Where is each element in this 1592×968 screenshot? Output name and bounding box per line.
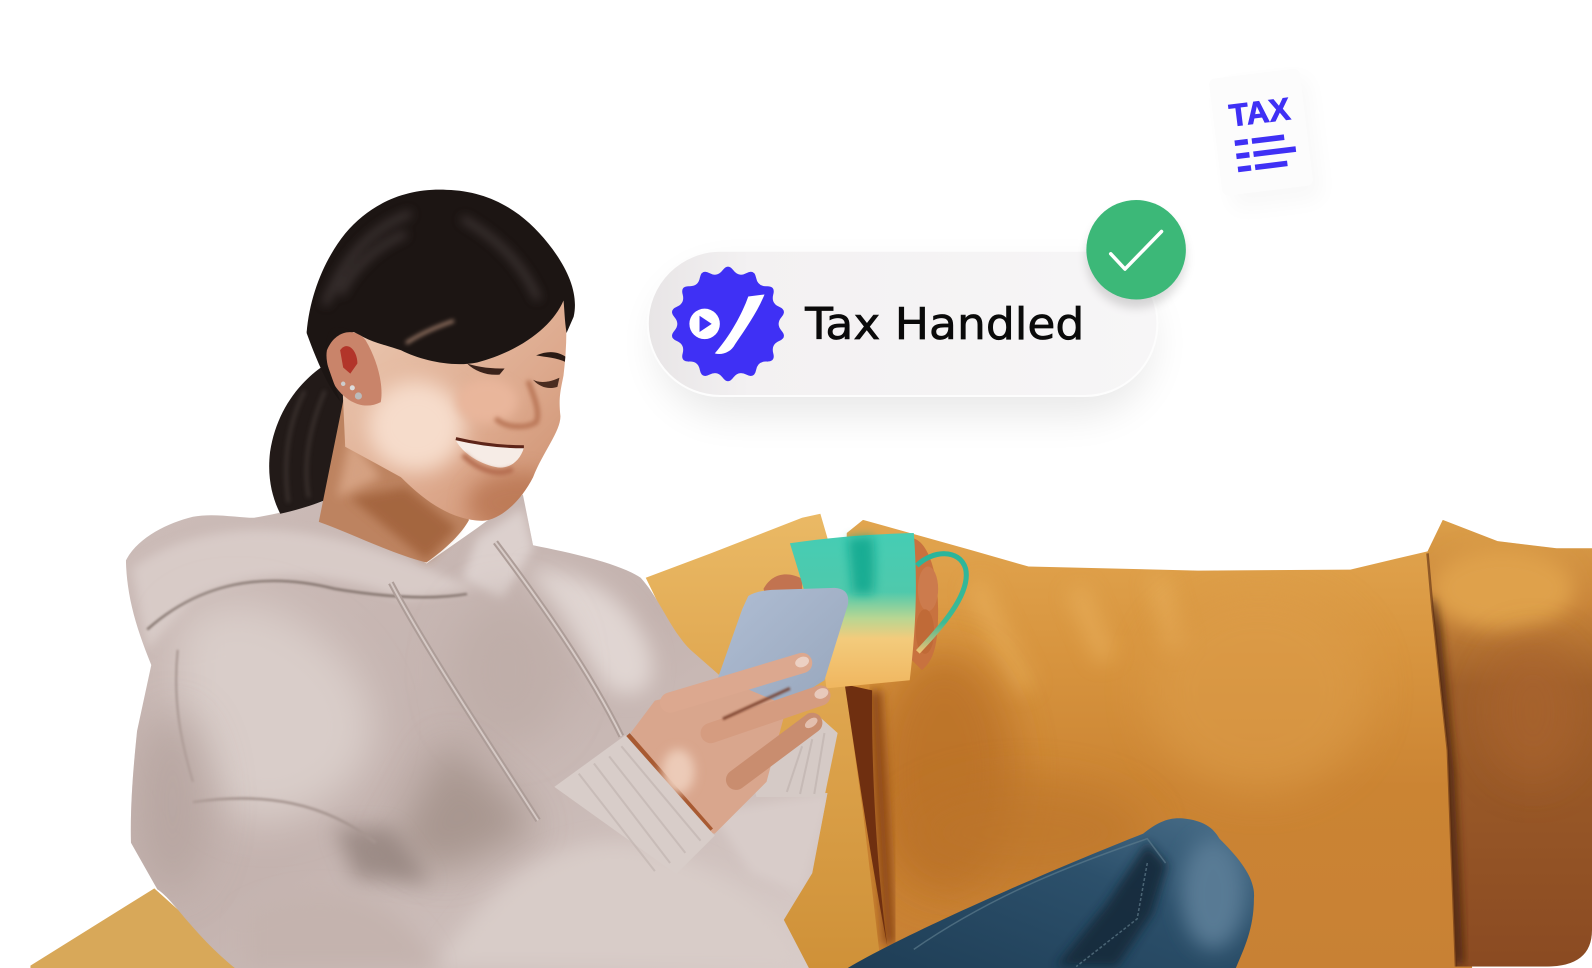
right cushion (1421, 513, 1592, 968)
mouth (456, 441, 524, 468)
hair (307, 190, 575, 401)
main cushion (838, 513, 1477, 968)
tax document icon (1208, 67, 1324, 212)
back hair behind ear (307, 317, 371, 411)
dark gap between cushions (845, 684, 887, 946)
mug (790, 533, 966, 688)
near sleeve cuff (554, 735, 715, 874)
ear with piercings (326, 332, 382, 406)
pillow behind mug (646, 514, 889, 968)
badge text: Tax Handled (804, 299, 1084, 350)
hood highlights and folds (132, 530, 477, 650)
eyes (467, 363, 505, 375)
right eyebrow (536, 352, 567, 362)
neck (319, 401, 469, 562)
nose (495, 381, 538, 427)
sofa seat left (30, 888, 244, 968)
hoodie (122, 492, 833, 968)
far sleeve cuff (753, 716, 838, 797)
document lines (1234, 133, 1298, 172)
mug hand behind (764, 538, 938, 670)
pill shadow (658, 272, 1151, 414)
face (342, 300, 566, 521)
sofa (30, 513, 1592, 968)
tax label: TAX (1227, 91, 1292, 134)
icon: scalloped logo badge (672, 267, 784, 381)
drawstring right (495, 542, 621, 736)
hair shine strands (325, 213, 538, 305)
drawstring left (391, 583, 538, 820)
badge: Tax Handled (648, 251, 1157, 414)
fingers on mug (911, 538, 938, 670)
pill (648, 251, 1157, 396)
jeans (843, 812, 1259, 968)
cushion seam (1428, 553, 1456, 967)
green check circle (1086, 200, 1186, 308)
hand holding phone (627, 655, 830, 834)
phone (712, 588, 848, 716)
ponytail (269, 363, 350, 514)
